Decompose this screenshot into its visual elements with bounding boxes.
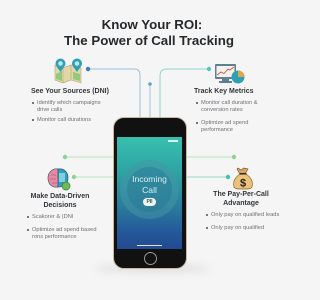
bullet text: performance <box>201 127 233 133</box>
bullet text: conversion rates <box>201 107 243 113</box>
status bar <box>168 140 178 142</box>
bullet text <box>32 100 101 113</box>
panel: pay-per-call advantage <box>206 190 280 231</box>
heading: Make Data-Driven <box>31 193 89 200</box>
icon: money bag: $ <box>240 178 246 190</box>
panel: make data-driven decisions <box>27 192 96 240</box>
call badge <box>143 198 156 206</box>
bullet text <box>27 227 96 240</box>
bullet text: Scakorer & (DNI <box>32 214 73 220</box>
call badge: P​II <box>146 199 153 205</box>
floor shadow under phone <box>95 265 210 272</box>
bullet text: rons performance <box>32 234 77 240</box>
incoming call inner circle <box>127 167 172 212</box>
icon: money bag <box>233 168 253 190</box>
phone <box>113 117 187 269</box>
icon: monitor with chart <box>215 64 244 84</box>
heading: Decisions <box>43 202 77 208</box>
panel: see your sources <box>31 88 109 123</box>
bullet text: Optimize ad spend based <box>32 227 96 233</box>
bullet text: Optimize ad spend <box>201 120 248 126</box>
bullet text: Identify which campaigns <box>37 100 101 106</box>
bullet text: Only pay on qualified leads <box>211 212 279 218</box>
heading: Advantage <box>223 200 259 206</box>
panel: track key metrics <box>194 88 258 133</box>
bullet text: Monitor call durations <box>37 117 91 123</box>
incoming call text: Call <box>142 185 157 195</box>
title: Know Your ROI: <box>102 17 202 32</box>
incoming call text: Incoming <box>132 174 167 184</box>
phone screen <box>117 137 182 249</box>
home indicator <box>137 245 162 246</box>
bullet text: drive calls <box>37 107 62 113</box>
heading: The Pay-Per-Call <box>213 191 269 198</box>
heading: See Your Sources (DNI) <box>31 88 109 95</box>
icon: map with pins <box>54 58 82 84</box>
home button <box>144 252 157 265</box>
bullet text: Monitor call duration & <box>201 100 258 106</box>
incoming call text <box>132 174 167 195</box>
heading <box>31 192 89 208</box>
bullet text: Only pay on qualified <box>211 225 264 231</box>
title <box>64 17 234 48</box>
heading <box>213 190 269 206</box>
bullet text <box>196 120 248 133</box>
incoming call ring <box>120 160 179 219</box>
bullet text <box>196 100 258 113</box>
icon: brain and chip <box>48 168 70 190</box>
heading: Track Key Metrics <box>194 88 254 95</box>
title: The Power of Call Tracking <box>64 33 234 48</box>
